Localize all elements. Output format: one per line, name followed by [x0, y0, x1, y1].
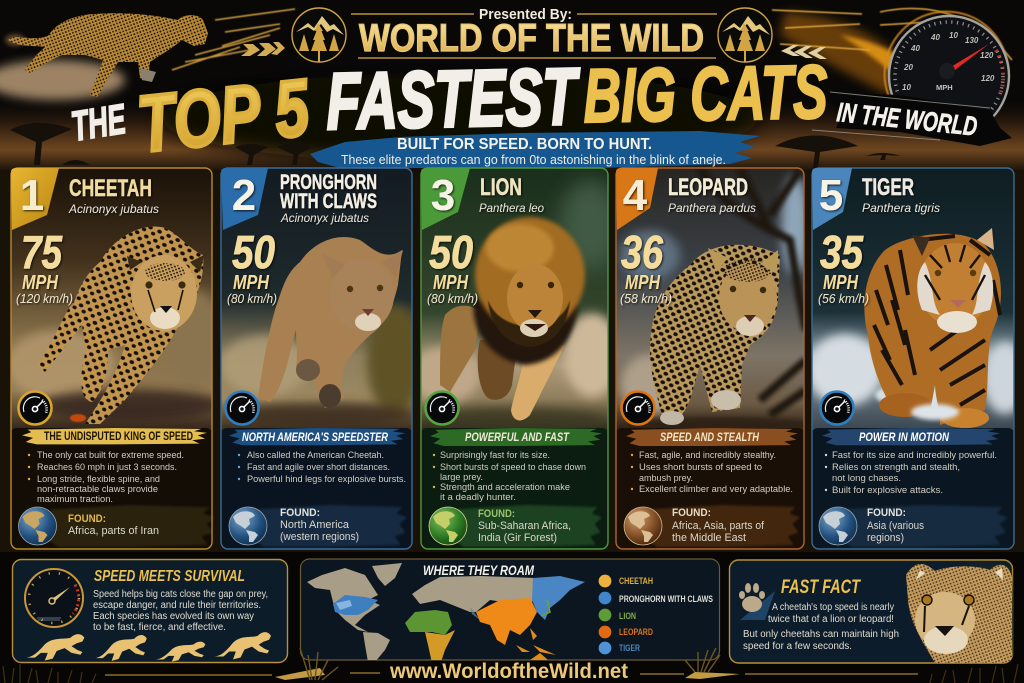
facts — [433, 450, 586, 503]
icon: dial — [25, 569, 83, 627]
facts: Fast for its size and incredibly powerful. — [832, 450, 997, 461]
text: Speed helps big cats close the gap on prey, — [93, 589, 268, 600]
tiger photo — [864, 228, 1001, 428]
facts — [825, 450, 997, 496]
icon: cat silhouettes — [25, 632, 271, 662]
found: regions) — [867, 532, 904, 544]
ribbon — [822, 428, 1000, 445]
facts: not long chases. — [832, 473, 901, 484]
ribbon: SPEED AND STEALTH — [660, 432, 760, 444]
cheetah portrait — [906, 560, 1013, 663]
icon: gauge — [426, 392, 458, 424]
name: PRONGHORN — [280, 171, 377, 194]
name — [479, 174, 544, 215]
icon: globe — [18, 507, 56, 545]
speed: (80 km/h) — [227, 292, 277, 306]
speedometer: 10 — [902, 83, 911, 92]
found: FOUND: — [280, 507, 320, 519]
speed: 50 — [429, 226, 473, 278]
legend: CHEETAH — [619, 576, 653, 586]
text — [93, 589, 268, 633]
facts: large prey. — [440, 472, 483, 483]
found: FOUND: — [867, 507, 906, 519]
tagline banner: BUILT FOR SPEED. BORN TO HUNT. — [397, 136, 652, 153]
rank badge — [11, 168, 59, 230]
text: escape danger, and rule their territories. — [93, 600, 261, 611]
name: Acinonyx jubatus — [280, 211, 369, 225]
legend — [599, 575, 713, 654]
facts: non-retractable claws provide — [37, 484, 158, 495]
name: Panthera tigris — [862, 201, 940, 215]
text: But only cheetahs can maintain high — [743, 629, 899, 640]
found: (western regions) — [280, 531, 359, 543]
speedometer: 120 — [981, 74, 995, 83]
facts — [238, 450, 406, 485]
legend: TIGER — [619, 643, 640, 653]
found band — [45, 505, 215, 547]
puma photo — [258, 237, 403, 408]
cheetah photo — [38, 227, 204, 424]
legend: LION — [619, 611, 636, 621]
leopard photo — [650, 245, 780, 425]
speed — [227, 226, 277, 306]
ribbon: NORTH AMERICA'S SPEEDSTER — [242, 432, 389, 444]
name — [668, 174, 756, 215]
found band — [645, 505, 800, 547]
facts: ambush prey. — [639, 473, 693, 484]
facts: Built for explosive attacks. — [832, 485, 943, 496]
speed: (120 km/h) — [16, 292, 73, 306]
name: CHEETAH — [69, 175, 152, 202]
tagline banner: These elite predators can go from 0to astonishing in the blink of aneje. — [341, 152, 726, 167]
footer grass — [3, 648, 1018, 683]
name: Acinonyx jubatus — [68, 202, 159, 216]
facts: Long stride, flexible spine, and — [37, 474, 160, 485]
speed — [620, 226, 672, 306]
panel: pronghorn card — [220, 168, 423, 549]
facts: Uses short bursts of speed to — [639, 462, 762, 473]
icon: globe — [624, 507, 662, 545]
facts: Short bursts of speed to chase down — [440, 462, 586, 473]
found: Asia (various — [867, 520, 924, 532]
rank badge — [812, 168, 852, 230]
panel: leopard card — [616, 168, 810, 549]
found band — [252, 505, 407, 547]
speed — [427, 226, 478, 306]
panel: cheetah card — [5, 168, 223, 549]
rank badge: 4 — [623, 171, 648, 220]
rank badge: 3 — [431, 171, 455, 220]
facts: Fast and agile over short distances. — [247, 462, 390, 473]
rank badge — [421, 168, 470, 230]
speed: MPH — [433, 272, 468, 294]
title: big cats: BIG CATS — [583, 50, 828, 139]
presented by: Presented By: — [479, 7, 572, 23]
panel: tiger card — [807, 168, 1024, 549]
facts — [28, 450, 184, 505]
footer url: www.WorldoftheWild.net — [389, 660, 628, 683]
title: fastest: FASTEST — [325, 52, 582, 146]
icon: gauge — [622, 392, 654, 424]
speed streaks and chevrons left — [172, 9, 295, 70]
rank badge — [616, 168, 658, 230]
icon: paw — [739, 583, 775, 620]
speed: (80 km/h) — [427, 292, 478, 306]
facts: Relies on strength and stealth, — [832, 462, 960, 473]
facts: Excellent climber and very adaptable. — [639, 484, 793, 495]
found — [68, 513, 159, 537]
facts: Surprisingly fast for its size. — [440, 450, 550, 461]
legend: LEOPARD — [619, 627, 653, 637]
name: LEOPARD — [668, 174, 748, 201]
logo left — [292, 8, 346, 62]
ribbon: THE UNDISPUTED KING OF SPEED — [44, 431, 193, 443]
speed: 75 — [21, 226, 63, 278]
speedometer: MPH — [936, 83, 953, 92]
found: FOUND: — [672, 507, 711, 519]
found — [478, 508, 571, 544]
facts: maximum traction. — [37, 494, 113, 505]
name — [280, 171, 377, 225]
found — [280, 507, 359, 543]
speed: MPH — [625, 272, 660, 294]
ribbon — [229, 428, 405, 445]
speed — [16, 226, 73, 306]
facts: Fast, agile, and incredibly stealthy. — [639, 450, 776, 461]
found: Africa, Asia, parts of — [672, 520, 765, 532]
icon: globe — [429, 507, 467, 545]
facts: The only cat built for extreme speed. — [37, 450, 184, 461]
speedometer: 130 — [965, 36, 979, 45]
found: FOUND: — [68, 513, 106, 525]
found: the Middle East — [672, 532, 746, 544]
name: TIGER — [862, 174, 914, 201]
panel: lion card — [410, 168, 620, 549]
speedometer: 40 — [910, 44, 920, 53]
speed: MPH — [823, 272, 858, 294]
found: North America — [280, 519, 350, 531]
text: to be fast, fierce, and effective. — [93, 622, 226, 633]
speed: MPH — [233, 272, 269, 294]
text — [743, 602, 899, 652]
savanna trees — [10, 123, 900, 168]
world map — [307, 563, 585, 665]
found: Africa, parts of Iran — [68, 525, 159, 537]
name — [68, 175, 159, 216]
heading: WHERE THEY ROAM — [423, 562, 534, 578]
heading: SPEED MEETS SURVIVAL — [94, 568, 245, 585]
panel: where they roam — [300, 559, 720, 665]
facts: Strength and acceleration make — [440, 482, 570, 493]
rank badge — [221, 168, 268, 230]
icon: gauge — [226, 392, 258, 424]
speedometer: 40 — [930, 33, 940, 42]
speed: 36 — [621, 226, 663, 278]
heading: FAST FACT — [781, 577, 861, 598]
speedometer: 10 — [949, 31, 958, 40]
panel: speed meets survival — [12, 560, 288, 662]
text: A cheetah's top speed is nearly — [772, 602, 894, 613]
speed: MPH — [22, 272, 58, 294]
speedometer: 120 — [980, 51, 994, 60]
title: the: THE — [68, 95, 130, 150]
rank badge: 2 — [232, 171, 256, 220]
fire streaks and chevrons right — [772, 8, 1012, 95]
facts: it a deadly hunter. — [440, 492, 516, 503]
icon: globe — [819, 507, 857, 545]
found — [867, 507, 924, 544]
facts: Powerful hind legs for explosive bursts. — [247, 474, 406, 485]
ribbon — [22, 428, 207, 444]
ribbon — [430, 428, 602, 446]
found band — [838, 505, 1008, 547]
icon: gauge — [18, 392, 52, 424]
facts: Reaches 60 mph in just 3 seconds. — [37, 462, 177, 473]
speed: 50 — [232, 226, 275, 278]
text: Each species has evolved its own way — [93, 611, 254, 622]
logo right — [718, 8, 772, 62]
text: speed for a few seconds. — [743, 641, 852, 652]
speed: 35 — [820, 226, 864, 278]
icon: gauge — [820, 392, 854, 424]
found: Sub-Saharan Africa, — [478, 520, 571, 532]
name — [862, 174, 940, 215]
speed — [818, 226, 869, 306]
lion photo — [440, 217, 585, 420]
found band — [452, 505, 602, 547]
speed: (56 km/h) — [818, 292, 869, 306]
ribbon — [626, 428, 798, 446]
facts — [631, 450, 793, 495]
found: FOUND: — [478, 508, 515, 520]
facts: Also called the American Cheetah. — [247, 450, 384, 461]
name: Panthera leo — [479, 201, 544, 215]
name: LION — [480, 174, 522, 201]
speedometer: 20 — [903, 63, 913, 72]
ribbon: POWER IN MOTION — [859, 432, 950, 444]
found: India (Gir Forest) — [478, 532, 557, 544]
icon: globe — [229, 507, 267, 545]
running cheetah with dust — [0, 13, 208, 100]
ribbon: POWERFUL AND FAST — [465, 432, 570, 444]
brand name: WORLD OF THE WILD — [359, 17, 704, 60]
speedometer — [885, 12, 1009, 136]
legend: PRONGHORN WITH CLAWS — [619, 594, 713, 604]
rank badge: 5 — [819, 171, 843, 220]
speed: (58 km/h) — [620, 292, 672, 306]
name: WITH CLAWS — [280, 190, 377, 213]
rank badge: 1 — [20, 171, 44, 220]
title: top 5: TOP 5 — [133, 62, 314, 169]
text: twice that of a lion or leopard! — [768, 614, 894, 625]
found — [672, 507, 765, 544]
panel: fast fact — [730, 560, 1024, 670]
tagline banner — [310, 131, 760, 168]
name: Panthera pardus — [668, 201, 756, 215]
